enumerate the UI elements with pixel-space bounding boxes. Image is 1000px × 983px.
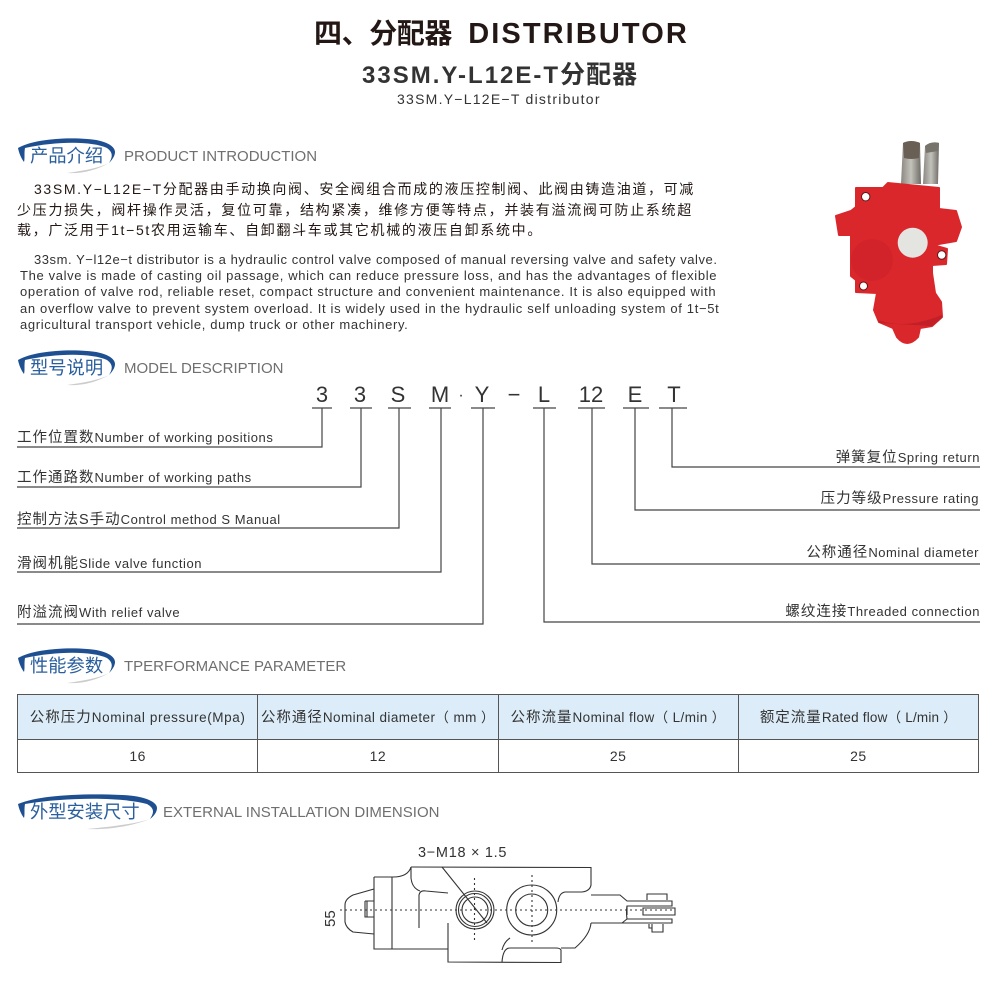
chinese introduction text: 载，广泛用于1t−5t农用运输车、自卸翻斗车或其它机械的液压自卸系统中。 bbox=[17, 222, 543, 238]
performance table: 16 bbox=[129, 748, 146, 764]
heading: external installation dimension: 外型安装尺寸 bbox=[30, 801, 140, 822]
dimension drawing bbox=[322, 845, 676, 963]
model code diagram with leader lines: 工作通路数Number of working paths bbox=[17, 470, 252, 486]
english introduction text: agricultural transport vehicle, dump truck or other machinery. bbox=[20, 317, 408, 332]
model code diagram with leader lines: 螺纹连接Threaded connection bbox=[785, 604, 980, 620]
heading: model description: MODEL DESCRIPTION bbox=[124, 360, 283, 377]
performance table: 公称流量Nominal flow（ L/min ） bbox=[511, 710, 726, 726]
heading: performance parameter bbox=[18, 648, 346, 684]
english introduction text bbox=[20, 252, 719, 332]
model code characters: S bbox=[391, 382, 405, 407]
model code characters: Y bbox=[475, 382, 490, 407]
right labels: 弹簧复位Spring return bbox=[836, 450, 980, 466]
model code diagram with leader lines: 压力等级Pressure rating bbox=[821, 491, 979, 507]
english introduction text: operation of valve rod, reliable reset, compact structure and convenient maintenance. It is also equipped with bbox=[20, 284, 716, 299]
chinese introduction text: 33SM.Y−L12E−T分配器由手动换向阀、安全阀组合而成的液压控制阀、此阀由铸造油道，可减 bbox=[34, 181, 695, 197]
model code diagram with leader lines: 控制方法S手动Control method S Manual bbox=[17, 512, 281, 528]
valve body outline bbox=[340, 867, 675, 962]
chinese introduction text: 少压力损失，阀杆操作灵活，复位可靠，结构紧凑，维修方便等特点，并装有溢流阀可防止系统超 bbox=[17, 202, 693, 218]
performance table: 额定流量Rated flow（ L/min ） bbox=[760, 710, 957, 726]
heading: product introduction bbox=[18, 138, 317, 174]
model code characters: L bbox=[538, 382, 550, 407]
model code characters: 12 bbox=[579, 382, 603, 407]
heading: performance parameter: 性能参数 bbox=[30, 655, 103, 676]
performance table: 25 bbox=[850, 748, 867, 764]
performance table: 12 bbox=[370, 748, 386, 764]
model code diagram with leader lines: 滑阀机能Slide valve function bbox=[17, 556, 202, 572]
dimension label: 55: 55 bbox=[322, 910, 339, 927]
model code characters: T bbox=[667, 382, 681, 407]
performance table: 25 bbox=[610, 748, 626, 764]
model code characters: M bbox=[431, 382, 449, 407]
chinese introduction text bbox=[17, 181, 695, 238]
model code diagram with leader lines: 公称通径Nominal diameter bbox=[806, 545, 979, 561]
heading: performance parameter: TPERFORMANCE PARAMETER bbox=[124, 658, 346, 675]
left labels: 工作位置数Number of working positions bbox=[17, 430, 273, 446]
english introduction text: The valve is made of casting oil passage, which can reduce pressure loss, and has the advantages of flexible bbox=[20, 268, 717, 283]
english subtitle: 33SM.Y−L12E−T distributor bbox=[397, 91, 601, 107]
product photo: red distributor valve bbox=[835, 141, 962, 344]
heading: product introduction: 产品介绍 bbox=[30, 145, 103, 166]
model code characters: E bbox=[628, 382, 642, 407]
english introduction text: 33sm. Y−l12e−t distributor is a hydraulic control valve composed of manual reversing valve and safety valve. bbox=[34, 252, 717, 267]
heading: model description: 型号说明 bbox=[30, 357, 103, 378]
heading: external installation dimension: EXTERNAL INSTALLATION DIMENSION bbox=[163, 804, 439, 821]
english introduction text: an overflow valve to prevent system overload. It is widely used in the hydraulic self unloading system of 1t−5t bbox=[20, 301, 719, 316]
performance table: 公称通径Nominal diameter（ mm ） bbox=[261, 710, 495, 726]
model code characters: 3 bbox=[354, 382, 366, 407]
heading: model description bbox=[18, 350, 283, 386]
model code characters: 3 bbox=[316, 382, 328, 407]
dimension label: thread: 3−M18 × 1.5 bbox=[418, 845, 507, 861]
model code characters: − bbox=[508, 382, 520, 407]
title: 四、分配器 DISTRIBUTOR bbox=[314, 18, 689, 50]
performance table: 公称压力Nominal pressure(Mpa) bbox=[30, 710, 245, 726]
model code diagram with leader lines bbox=[17, 382, 980, 625]
heading: product introduction: PRODUCT INTRODUCTION bbox=[124, 148, 317, 165]
heading: external installation dimension bbox=[18, 794, 439, 830]
model code diagram with leader lines: 附溢流阀With relief valve bbox=[17, 605, 180, 621]
subtitle: 33SM.Y-L12E-T分配器 bbox=[362, 61, 638, 89]
performance table bbox=[17, 694, 979, 773]
model code characters: · bbox=[458, 387, 464, 404]
model code characters bbox=[17, 382, 980, 625]
